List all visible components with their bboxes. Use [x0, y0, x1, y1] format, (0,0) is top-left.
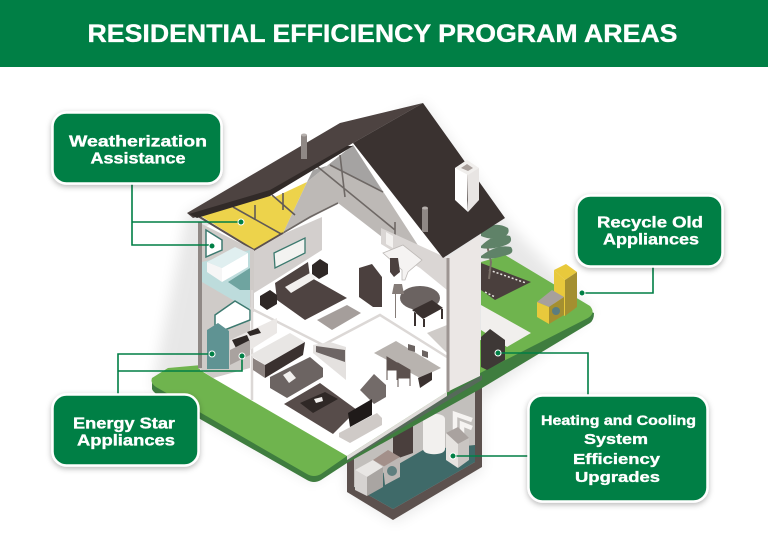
floor lamp: [392, 284, 404, 318]
bedroom wall: [254, 217, 322, 293]
armchair: [360, 374, 386, 404]
basement: [347, 375, 482, 520]
wardrobe: [359, 264, 382, 307]
kitchen window: [215, 301, 250, 331]
floor edge strip: [347, 375, 482, 461]
bookshelf: [313, 342, 346, 380]
chimney: [455, 160, 479, 212]
callout: energy star appliances: Energy Star: [73, 416, 175, 432]
right pillar wall: [447, 235, 480, 392]
bathroom: [202, 247, 250, 310]
callout: energy star appliances: Appliances: [77, 432, 175, 450]
bed: [275, 262, 347, 320]
laundry: [355, 450, 400, 496]
recycled fridge: [554, 264, 577, 280]
coffee table: [300, 392, 338, 413]
callout: heating and cooling system efficiency upgrades: Upgrades: [575, 469, 660, 486]
tv: [348, 399, 372, 427]
island: [250, 333, 305, 365]
upper window: [206, 230, 222, 257]
back gable wall: [283, 145, 447, 290]
wall art: [274, 238, 305, 268]
left wall: [198, 222, 254, 378]
tv stand: [339, 413, 382, 443]
soft ground shadow: [152, 103, 593, 522]
callout: heating and cooling system efficiency upgrades: Heating and Cooling: [541, 413, 696, 428]
roof: [187, 103, 505, 258]
callout: weatherization assistance: Weatherization: [69, 134, 207, 150]
title banner: [0, 0, 768, 67]
water heater: [423, 414, 445, 454]
light switch panel: [386, 232, 393, 248]
upper floor edges: [250, 290, 447, 400]
nightstands: [260, 290, 277, 310]
dining set: [374, 341, 441, 388]
desk: [383, 245, 422, 280]
callout: heating and cooling system efficiency upgrades: [528, 396, 708, 502]
vent pipes: [301, 134, 428, 232]
fridge: [207, 323, 229, 369]
callout: recycle old appliances: [576, 196, 722, 266]
counter: [230, 318, 277, 365]
furnace: [446, 414, 472, 468]
lawn: [152, 255, 594, 482]
door: [393, 423, 413, 460]
recycled washer: [537, 290, 564, 307]
callout: recycle old appliances: Recycle Old: [597, 214, 703, 232]
callout: recycle old appliances: Appliances: [603, 232, 699, 248]
insulation panels: [198, 182, 307, 250]
yellow appliances: [537, 264, 577, 324]
kitchen: [207, 318, 346, 380]
garden bed and tree: [481, 225, 531, 300]
title banner: RESIDENTIAL EFFICIENCY PROGRAM AREAS: [88, 20, 678, 48]
callout: heating and cooling system efficiency upgrades: System: [584, 431, 648, 448]
house floor: [200, 143, 447, 456]
callout: weatherization assistance: Assistance: [90, 150, 186, 168]
striped rug: [317, 305, 361, 330]
round table: [400, 286, 443, 327]
bedroom furniture: [260, 245, 443, 330]
connector dots: [209, 219, 585, 459]
upper floor underside: [427, 325, 447, 353]
living room: [270, 341, 441, 443]
callout: weatherization assistance: [52, 112, 222, 184]
sofa: [270, 357, 323, 398]
rug: [284, 383, 357, 434]
house illustration: [152, 103, 594, 522]
callout: energy star appliances: [52, 394, 198, 466]
patio: [481, 305, 531, 347]
callout: heating and cooling system efficiency upgrades: Efficiency: [573, 451, 661, 468]
ac unit: [481, 329, 505, 370]
connector lines: [118, 180, 653, 456]
